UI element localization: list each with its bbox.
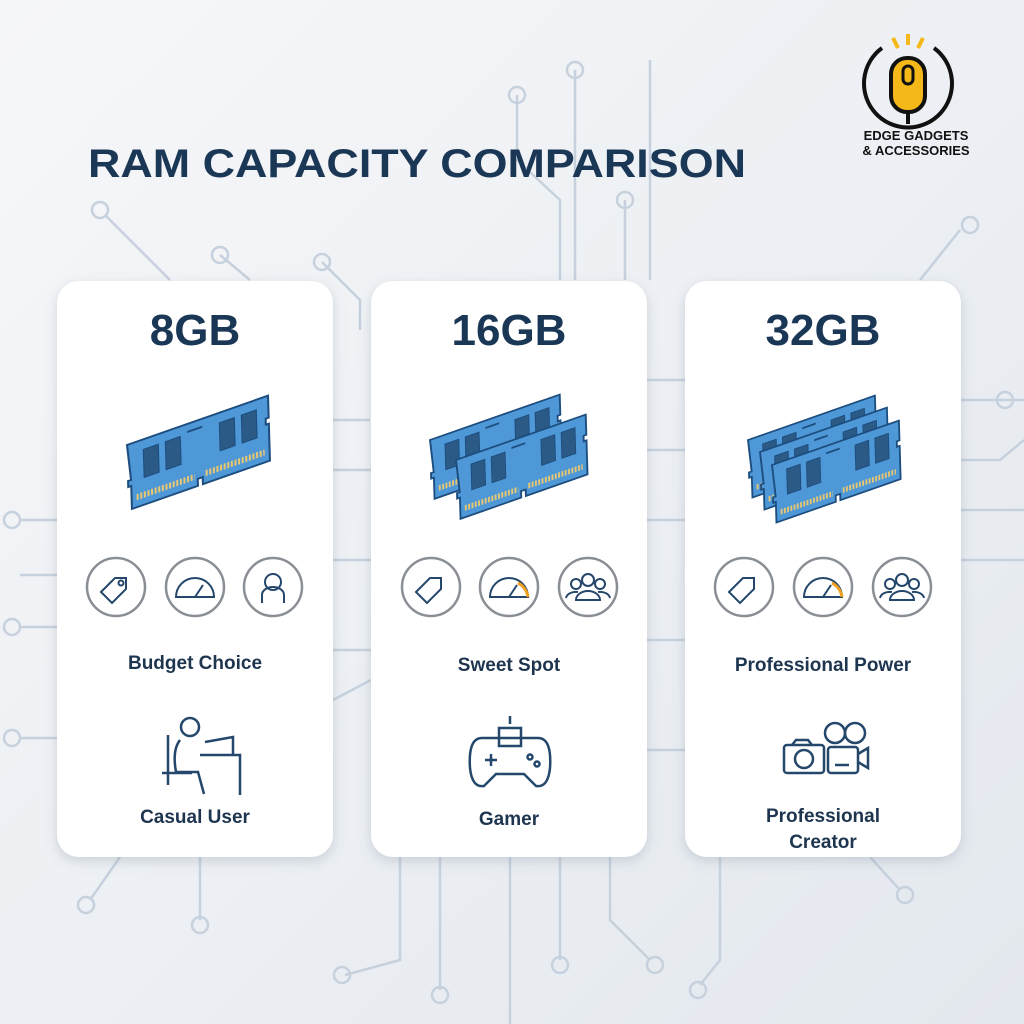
logo: EDGE GADGETS <box>864 128 969 143</box>
icon: casual user <box>162 718 240 795</box>
panel: 32GB: Creator <box>789 832 857 853</box>
label: Budget Choice: Budget Choice <box>128 653 262 674</box>
heading: 8GB: 8GB <box>150 306 240 355</box>
icon: cameras <box>784 723 868 773</box>
label: Professional Creator: Professional <box>766 806 880 827</box>
feature icons <box>402 558 617 616</box>
panel: 32GB <box>685 281 961 857</box>
panel: 16GB <box>371 281 647 857</box>
icon: three ram sticks <box>748 396 901 524</box>
feature icons <box>87 558 302 616</box>
label: Casual User: Casual User <box>140 807 251 828</box>
heading: 16GB: 16GB <box>452 306 566 355</box>
feature icons <box>715 558 931 616</box>
logo: & ACCESSORIES <box>862 143 970 158</box>
heading: 32GB: 32GB <box>766 306 880 355</box>
logo <box>862 34 970 158</box>
label: Gamer: Gamer <box>479 809 540 830</box>
panel: 8GB <box>57 281 333 857</box>
title: RAM CAPACITY COMPARISON <box>88 142 746 186</box>
icon: gamepad <box>470 716 550 786</box>
icon: two ram sticks <box>430 395 588 520</box>
label: Professional Power: Professional Power <box>735 655 912 676</box>
label: Sweet Spot: Sweet Spot <box>458 655 561 676</box>
icon: ram stick <box>127 396 270 510</box>
